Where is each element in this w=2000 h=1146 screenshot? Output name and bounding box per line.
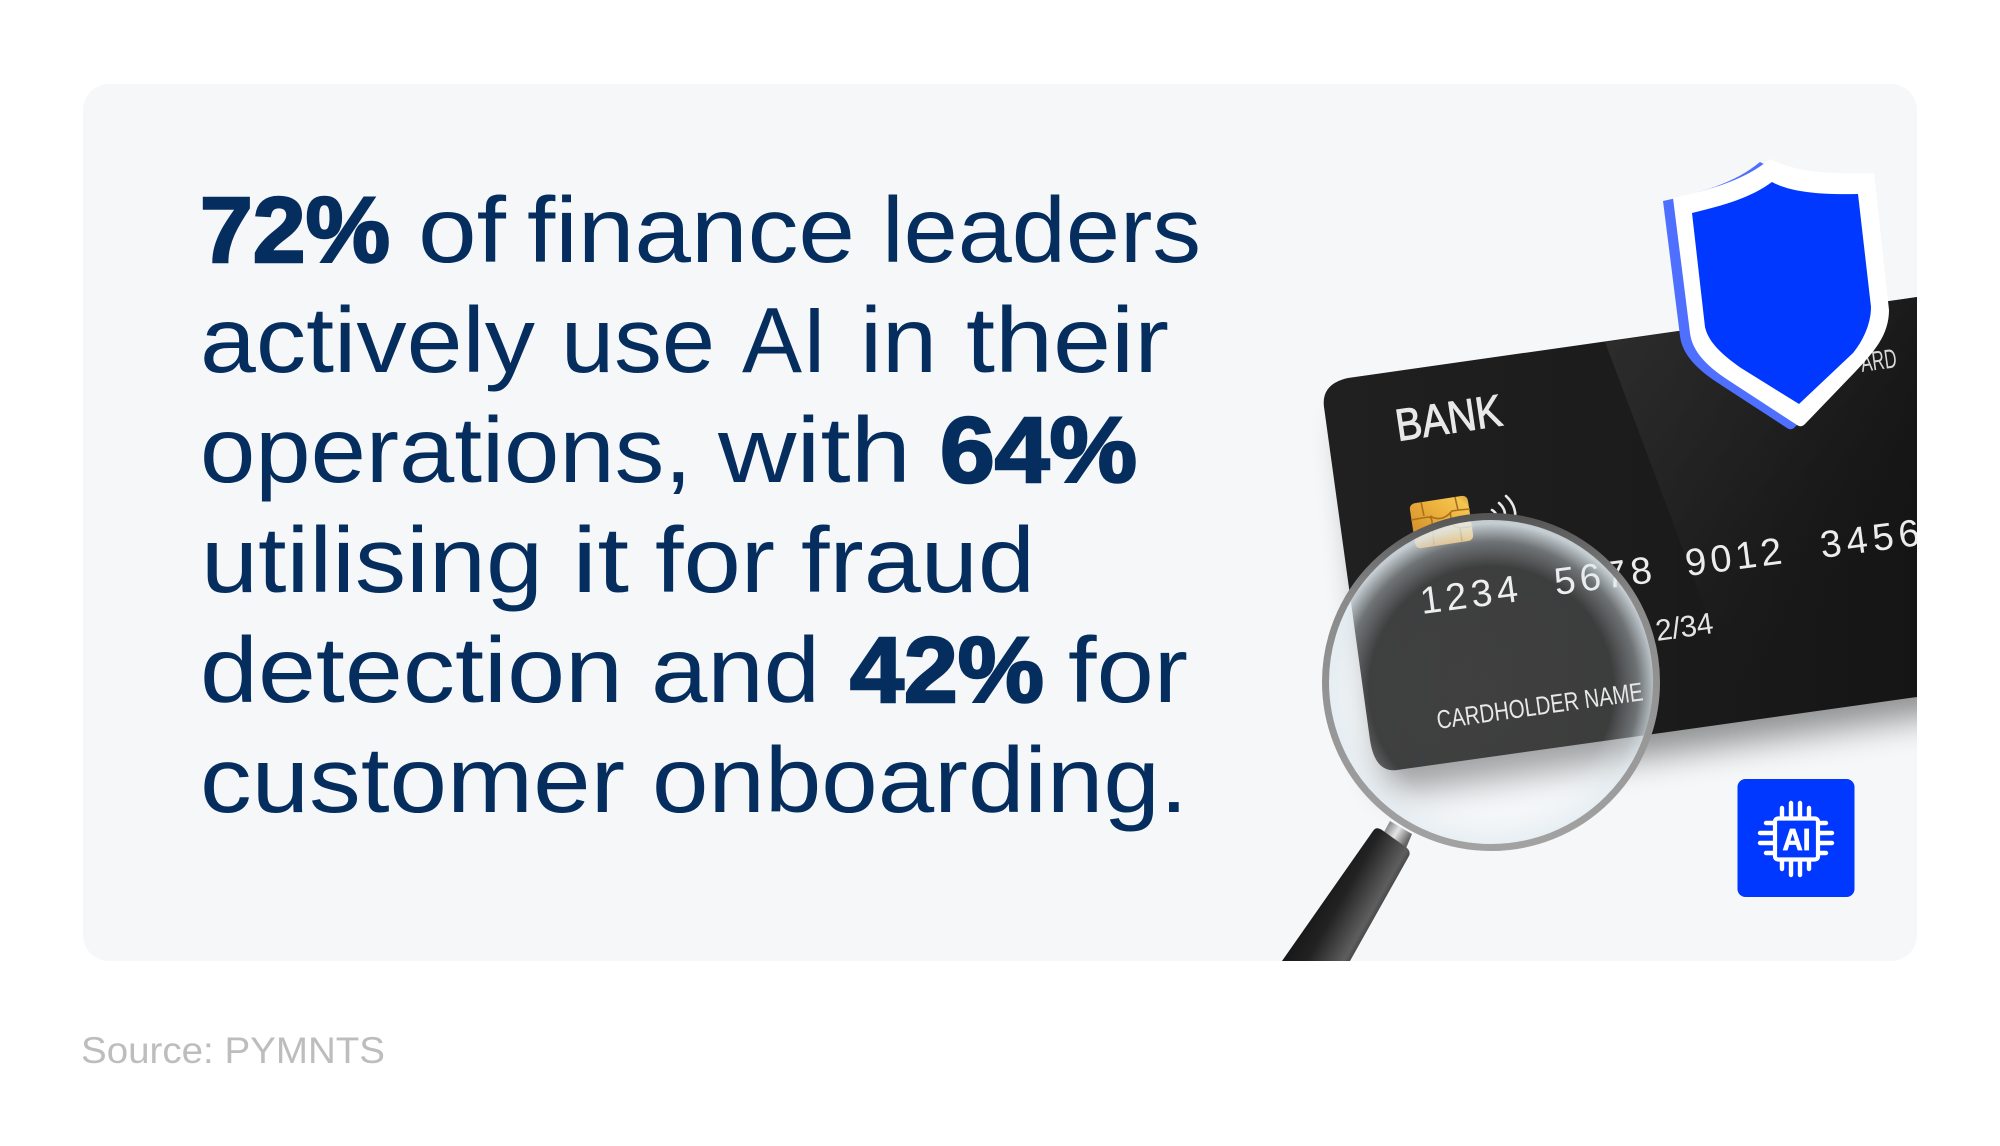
headline statement: it <box>572 508 629 612</box>
headline statement: detection <box>200 618 623 722</box>
headline statement: of <box>418 178 506 282</box>
headline statement: in <box>860 288 937 392</box>
headline statement: with <box>717 398 911 502</box>
card type label: ARD <box>1859 343 1898 378</box>
handle neck <box>1384 821 1412 848</box>
headline statement: their <box>966 288 1169 392</box>
card number: 3456 <box>1818 512 1922 567</box>
card number: 5678 <box>1552 549 1654 604</box>
card bank name: BANK <box>1392 385 1505 451</box>
cardholder name: CARDHOLDER NAME <box>1435 676 1645 735</box>
shield icon <box>1663 159 1889 429</box>
headline statement: use <box>561 288 715 392</box>
card number: 9012 <box>1683 531 1784 585</box>
headline statement: finance <box>527 178 855 282</box>
source note: Source: PYMNTS <box>81 1030 385 1071</box>
headline statement: 64% <box>940 398 1137 502</box>
headline statement: for <box>1068 618 1188 722</box>
icon: AI chip <box>1738 779 1854 897</box>
headline statement: operations, <box>200 398 692 502</box>
headline statement <box>200 178 1201 832</box>
magnifying glass <box>1282 516 1656 961</box>
lens glass <box>1326 517 1656 847</box>
headline statement: fraud <box>801 508 1035 612</box>
headline statement: and <box>651 618 820 722</box>
chip <box>1410 496 1473 548</box>
contactless symbol <box>1492 496 1515 520</box>
headline statement: AI <box>742 288 827 392</box>
illustration: credit card, magnifier and shield <box>1282 160 1917 961</box>
headline statement: utilising <box>201 508 543 612</box>
panel: background card <box>83 84 1917 961</box>
headline statement: onboarding. <box>652 728 1188 832</box>
handle <box>1282 828 1410 961</box>
headline statement: leaders <box>882 178 1201 282</box>
headline statement: 42% <box>850 618 1044 722</box>
headline statement: actively <box>200 288 536 392</box>
icon: AI chip: AI <box>1782 822 1810 857</box>
credit card <box>1324 297 1917 770</box>
headline statement: 72% <box>200 178 390 282</box>
headline statement: for <box>655 508 775 612</box>
card shadow <box>1326 430 1917 808</box>
expiry date: 2/34 <box>1653 607 1715 648</box>
headline statement: customer <box>200 728 625 832</box>
lens rim <box>1326 516 1656 848</box>
card number <box>1422 520 1917 614</box>
card number: 1234 <box>1418 568 1520 623</box>
